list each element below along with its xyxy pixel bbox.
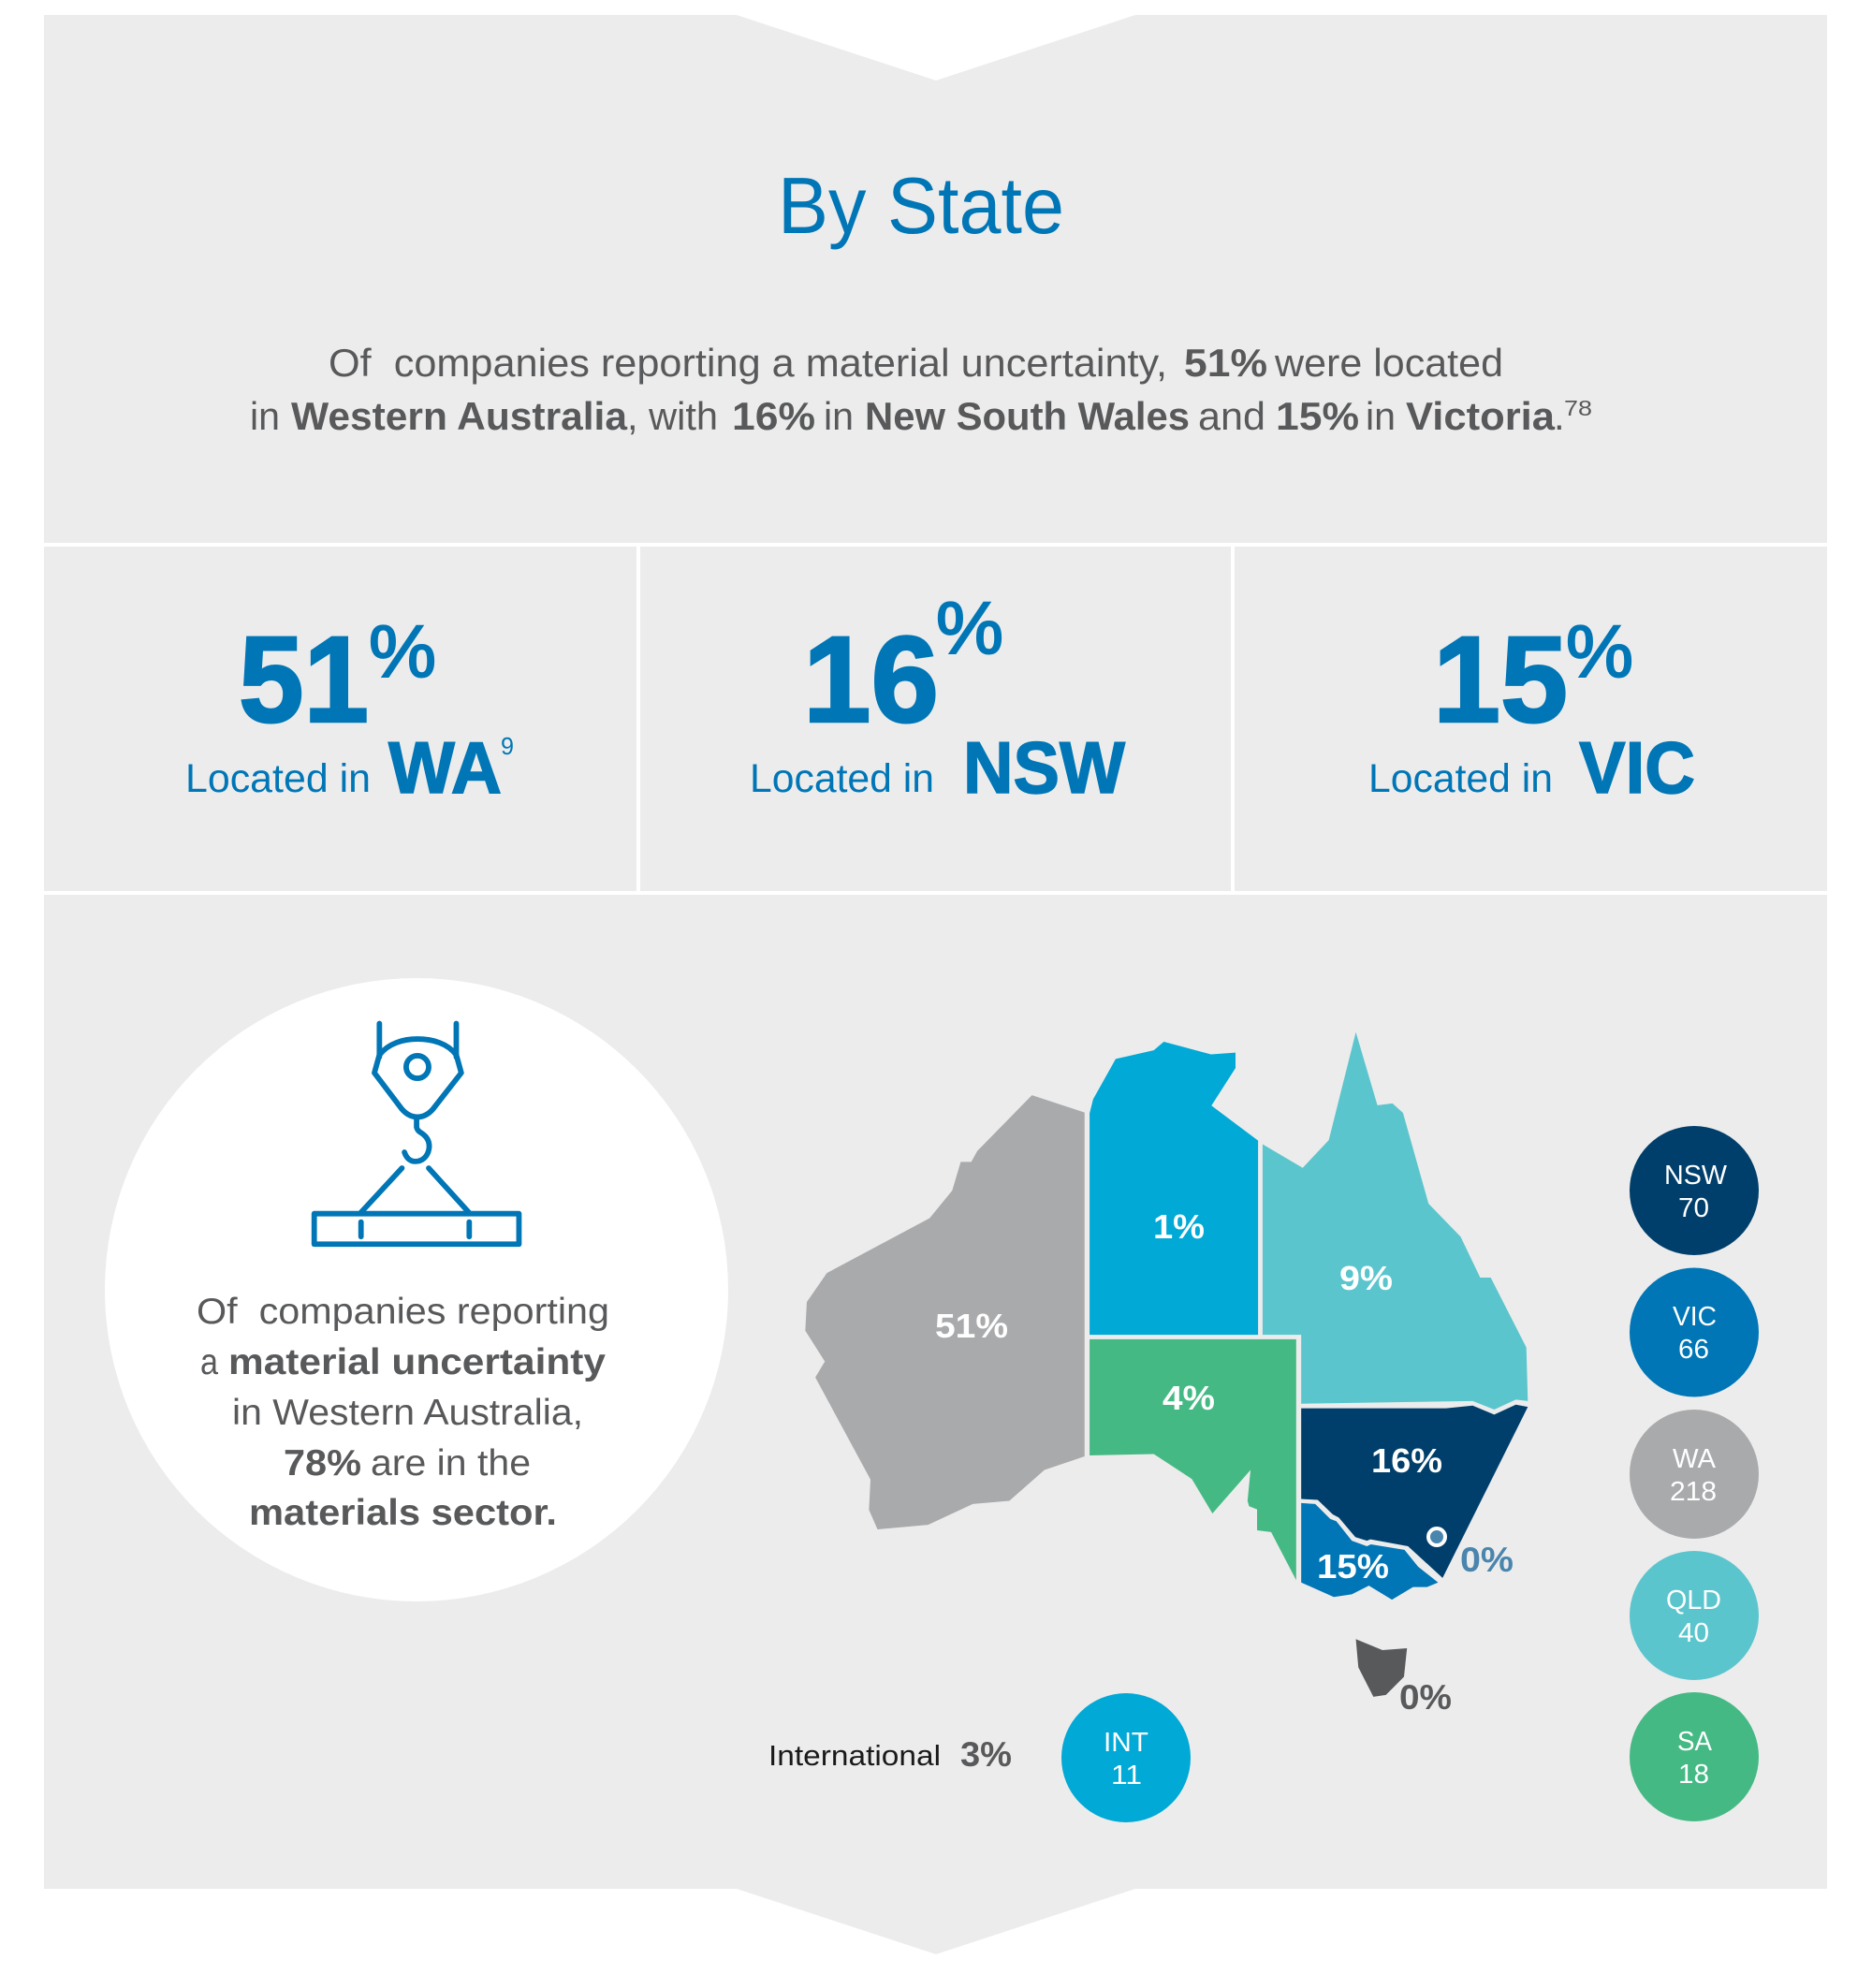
callout text: in Western Australia, xyxy=(232,1393,583,1433)
legend: NSW: NSW xyxy=(1664,1161,1728,1191)
title: By State xyxy=(778,162,1064,251)
map labels: 0% xyxy=(1460,1541,1514,1579)
intro text block: Western Australia xyxy=(291,394,628,438)
map marker: ACT xyxy=(1428,1528,1445,1545)
icon: crane hook lifting beam xyxy=(314,1024,519,1244)
map region: Queensland xyxy=(1263,1032,1528,1410)
stat: WA 51%: % xyxy=(369,609,436,693)
stat: VIC 15%: 15 xyxy=(1433,610,1568,748)
stat: VIC 15%: VIC xyxy=(1579,726,1695,809)
callout text: are in the xyxy=(371,1443,531,1484)
legend: International xyxy=(768,1693,1191,1822)
map region: Northern Territory xyxy=(1090,1042,1258,1335)
intro text block: . xyxy=(1554,394,1565,438)
map labels: 9% xyxy=(1339,1259,1393,1297)
legend: International: 11 xyxy=(1111,1761,1142,1791)
stat: WA 51%: Located in xyxy=(185,756,371,801)
map region: Western Australia xyxy=(805,1095,1085,1529)
intro text block: 51% xyxy=(1184,341,1267,385)
stat: NSW 16%: Located in xyxy=(750,756,934,801)
legend: SA: SA xyxy=(1677,1727,1713,1757)
stat: NSW 16% xyxy=(750,586,1125,809)
map labels: 0% xyxy=(1399,1678,1452,1717)
intro text block: were located xyxy=(1274,341,1503,385)
legend: QLD: QLD xyxy=(1666,1586,1721,1615)
map: Australia by state xyxy=(805,1032,1528,1717)
legend: QLD: 40 xyxy=(1678,1618,1709,1648)
legend: NSW: 70 xyxy=(1678,1193,1709,1223)
stat: NSW 16%: NSW xyxy=(963,726,1125,809)
intro text block: , with xyxy=(627,394,718,438)
stat: WA 51%: WA xyxy=(388,726,502,809)
legend: WA: WA xyxy=(1673,1444,1717,1474)
intro text block: in xyxy=(824,394,854,438)
intro text block: in xyxy=(250,394,280,438)
legend: International: INT xyxy=(1104,1728,1148,1758)
stat: NSW 16%: % xyxy=(936,586,1003,669)
intro text block: 16% xyxy=(732,394,815,438)
map labels: 51% xyxy=(935,1307,1008,1345)
legend: International: International xyxy=(768,1739,941,1772)
map region: Tasmania xyxy=(1356,1639,1407,1697)
stat: NSW 16%: 16 xyxy=(803,610,939,748)
intro text block: and xyxy=(1198,394,1265,438)
callout text: 78% xyxy=(284,1443,361,1484)
intro text block: Victoria xyxy=(1406,394,1556,438)
stat: WA 51%: 9 xyxy=(501,732,514,760)
stat: WA 51% xyxy=(185,609,514,809)
legend: WA: 218 xyxy=(1670,1477,1717,1507)
stat: WA 51%: 51 xyxy=(239,610,369,748)
map region: South Australia xyxy=(1090,1339,1296,1580)
legend: NSW xyxy=(1630,1126,1759,1255)
intro text block xyxy=(250,341,1592,438)
legend: QLD xyxy=(1630,1551,1759,1680)
callout text: materials sector. xyxy=(249,1493,557,1533)
intro text block: 15% xyxy=(1276,394,1359,438)
callout text: material uncertainty xyxy=(228,1342,606,1382)
stat: VIC 15%: Located in xyxy=(1368,756,1553,801)
map labels xyxy=(935,1207,1514,1717)
panel: white circle callout xyxy=(105,978,728,1601)
map labels: 16% xyxy=(1371,1441,1442,1480)
intro text block: New South Wales xyxy=(865,394,1190,438)
legend: International: 3% xyxy=(960,1735,1012,1774)
legend: WA xyxy=(1630,1410,1759,1539)
map region: Victoria xyxy=(1301,1503,1438,1600)
intro text block: 78 xyxy=(1564,396,1592,420)
callout text: Of companies reporting xyxy=(197,1292,609,1332)
intro text block: in xyxy=(1366,394,1396,438)
legend: SA: 18 xyxy=(1678,1760,1709,1790)
legend: VIC: VIC xyxy=(1673,1302,1717,1332)
map labels: 15% xyxy=(1317,1547,1389,1586)
legend: VIC xyxy=(1630,1267,1759,1396)
map labels: 1% xyxy=(1153,1207,1205,1246)
callout text xyxy=(197,1292,609,1533)
legend: SA xyxy=(1630,1692,1759,1821)
stat: VIC 15% xyxy=(1368,609,1695,809)
stat: VIC 15%: % xyxy=(1566,609,1633,693)
legend: VIC: 66 xyxy=(1678,1335,1709,1365)
callout text: a xyxy=(200,1342,218,1382)
map region: New South Wales xyxy=(1301,1405,1528,1578)
map labels: 4% xyxy=(1163,1379,1215,1417)
intro text block: Of companies reporting a material uncertainty, xyxy=(329,341,1167,385)
